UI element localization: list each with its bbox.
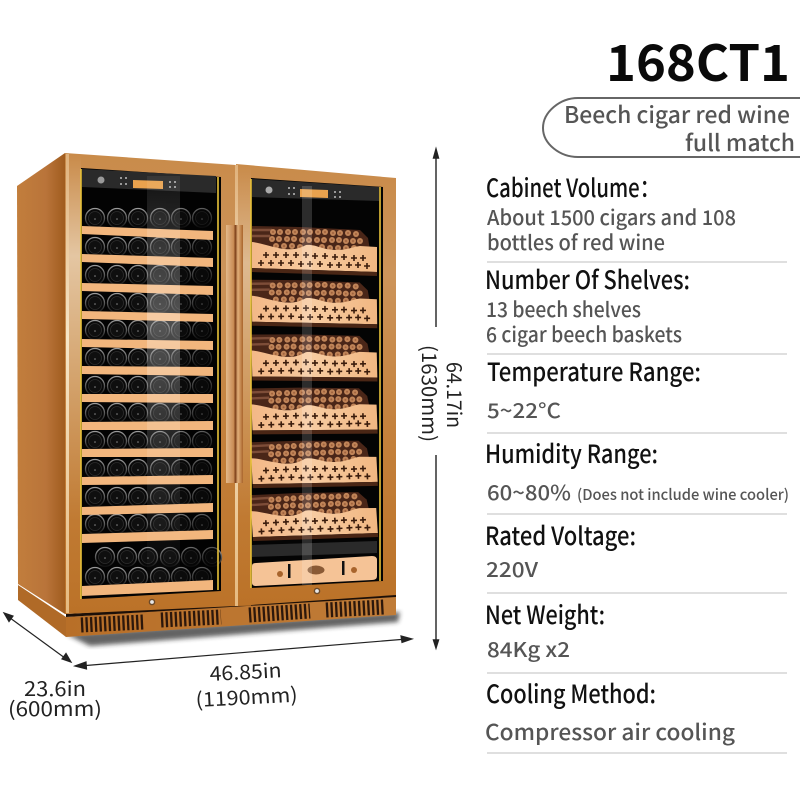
spec: cooling method: Compressor air cooling [485, 715, 735, 747]
spec: net weight: 84Kg x2 [487, 633, 570, 663]
vent: left door base [81, 607, 384, 625]
subtitle pill [543, 96, 800, 158]
right door frame [236, 164, 396, 606]
beech shelves [82, 226, 213, 596]
spec: number of shelves: 13 beech shelves [486, 293, 641, 323]
height label: 64.17in [441, 362, 470, 428]
cabinet base [18, 585, 396, 637]
spec: cabinet volume: About 1500 cigars and 108 [487, 201, 736, 231]
product illustration: dual-zone cabinet [17, 153, 400, 646]
spec: cabinet volume [486, 169, 736, 256]
spec: number of shelves: Number Of Shelves: [485, 261, 690, 297]
spec: cooling method: Cooling Method: [486, 675, 656, 711]
title: 168CT1 [606, 24, 790, 96]
depth label: 23.6in [24, 673, 86, 702]
spec: rated voltage [485, 517, 636, 583]
spec: rated voltage: 220V [486, 553, 539, 583]
lower shelf [252, 541, 377, 557]
width label: 46.85in [209, 654, 282, 687]
subtitle pill: full match [685, 124, 795, 158]
left door frame [65, 153, 236, 614]
right door glass [250, 178, 383, 588]
spec: number of shelves [485, 261, 690, 348]
spec: cabinet volume: Cabinet Volume： [486, 169, 660, 205]
floor shadow [66, 612, 400, 646]
spec: net weight [485, 596, 605, 663]
cabinet side panel [17, 153, 65, 614]
right control panel [252, 179, 379, 201]
height arrow [434, 149, 438, 648]
depth label: (600mm) [8, 693, 102, 722]
yellow glass trim [251, 179, 380, 588]
spec: humidity range: Humidity Range: [485, 435, 658, 471]
door locks [149, 588, 320, 605]
dimension: height [416, 149, 470, 648]
height label: (1630mm) [416, 345, 445, 442]
door edge highlights [66, 154, 238, 613]
glass reflection [302, 186, 312, 585]
right door stile [238, 166, 251, 606]
width arrow [75, 636, 412, 669]
spec: humidity range [485, 435, 789, 506]
wine bottles [86, 208, 222, 586]
width label [195, 654, 298, 713]
spec: cabinet volume: bottles of red wine [487, 226, 665, 256]
spec: temperature range [487, 353, 701, 424]
depth arrow [4, 613, 71, 662]
subtitle pill: Beech cigar red wine [564, 96, 790, 130]
yellow glass trim [81, 169, 218, 599]
glass reflection [147, 176, 180, 590]
spec: humidity range: 60~80% [487, 476, 571, 506]
left door light stile [66, 155, 81, 613]
height label [416, 345, 470, 442]
spec: rated voltage: Rated Voltage: [485, 517, 636, 553]
depth label [8, 673, 102, 722]
bottle dimming toward right [140, 200, 218, 590]
spec: number of shelves: 6 cigar beech baskets [486, 318, 682, 348]
spec: humidity range: (Does not include wine cooler) [577, 484, 789, 505]
spec: temperature range: 5~22°C [487, 394, 561, 424]
spec: net weight: Net Weight: [485, 596, 605, 632]
spec: cooling method [485, 675, 735, 747]
cigar baskets [250, 226, 378, 545]
left control panel [82, 169, 216, 193]
dimension: depth [4, 613, 102, 722]
width label: (1190mm) [195, 679, 298, 713]
spec: temperature range: Temperature Range: [487, 353, 701, 389]
humidifier control panel [252, 556, 377, 586]
dimension: width [75, 636, 412, 713]
left door glass [81, 168, 222, 599]
door handles [226, 225, 243, 483]
